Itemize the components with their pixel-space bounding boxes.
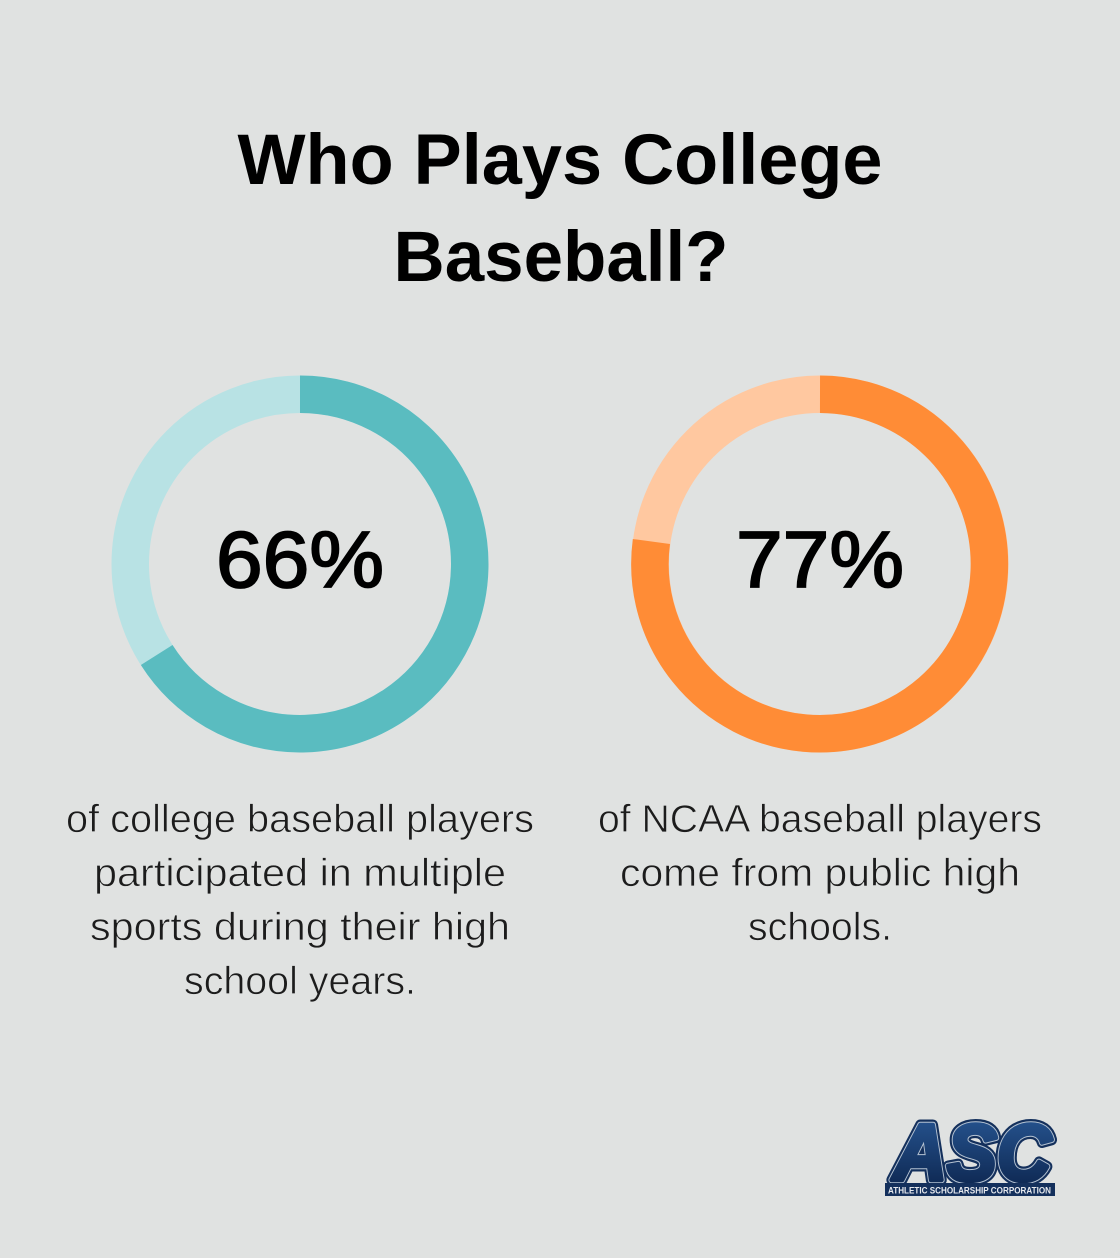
logo banner: ATHLETIC SCHOLARSHIP CORPORATION — [888, 1186, 1051, 1196]
value: 66%: 66% — [216, 515, 384, 604]
title: Baseball? — [394, 218, 728, 297]
description: 77% — [598, 798, 1042, 949]
donut chart: 66% — [130, 394, 470, 734]
description: 77%: of NCAA baseball players — [598, 798, 1042, 841]
description: 77%: schools. — [748, 906, 892, 949]
logo mark: ASC: ASC — [891, 1108, 1052, 1197]
description: 66%: sports during their high — [90, 906, 510, 949]
description: 66%: participated in multiple — [94, 852, 506, 895]
value: 77%: 77% — [736, 515, 904, 604]
logo mark: ASC: ASC — [891, 1108, 1052, 1197]
panel: 77% stat — [598, 394, 1042, 949]
panel: 66% stat — [66, 394, 534, 1003]
title: Who Plays College — [238, 121, 882, 200]
donut chart: 77% — [650, 394, 990, 734]
title — [238, 121, 882, 297]
description: 66%: of college baseball players — [66, 798, 534, 841]
logo mark: ASC: ASC — [891, 1108, 1052, 1197]
description: 66%: school years. — [184, 960, 416, 1003]
logo: Athletic Scholarship Corporation — [885, 1108, 1055, 1197]
description: 77%: come from public high — [620, 852, 1020, 895]
description: 66% — [66, 798, 534, 1003]
